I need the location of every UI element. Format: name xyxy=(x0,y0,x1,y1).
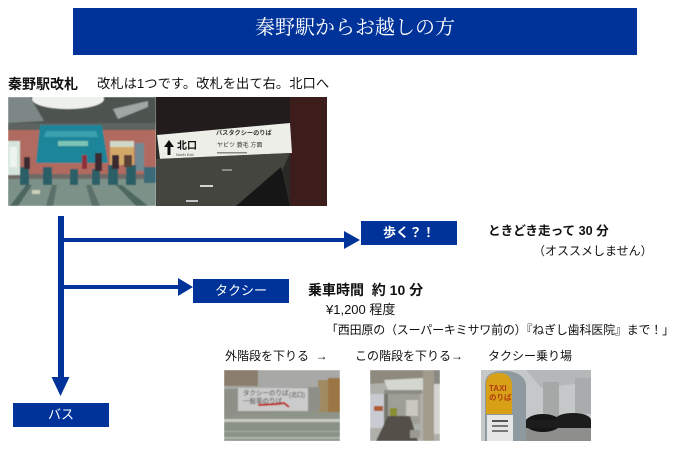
photo: north exit sign xyxy=(156,97,327,206)
title banner xyxy=(73,8,637,55)
caption: outer stairs: 外階段を下りる → xyxy=(225,349,328,363)
label: taxi xyxy=(193,279,289,303)
arrow: down to bus xyxy=(52,216,70,396)
text: taxi destination: 「西田原の（スーパーキミサワ前の）『ねぎし歯科医院』まで！」 xyxy=(326,323,674,337)
arrow: to walking xyxy=(64,231,360,249)
photo: taxi stand xyxy=(481,370,591,441)
photo: stair sign xyxy=(224,370,340,441)
text: gate directions: 改札は1つです。改札を出て右。北口へ xyxy=(97,76,329,91)
photo: ticket gates xyxy=(8,97,156,206)
photo: north exit sign: 北口 xyxy=(177,140,197,152)
label: taxi: タクシー xyxy=(215,283,267,298)
photo: taxi stand: TAXI xyxy=(489,384,507,393)
text: taxi ride time: 乗車時間 約 10 分 xyxy=(308,282,423,298)
text: walking time: ときどき走って 30 分 xyxy=(488,224,609,238)
photo: north exit sign: North Exit xyxy=(176,152,194,157)
photo: north exit sign: バスタクシーのりば xyxy=(216,129,272,137)
caption: taxi stand: タクシー乗り場 xyxy=(488,349,572,363)
arrow: to taxi xyxy=(64,278,193,296)
caption: these stairs: この階段を下りる→ xyxy=(355,349,463,363)
photo: taxi stand: のりば xyxy=(489,392,512,402)
photo: stairway entrance xyxy=(370,370,440,441)
text: taxi fare: ¥1,200 程度 xyxy=(326,302,395,317)
photo: stair sign: タクシーのりば xyxy=(243,388,289,397)
photo: stair sign: 一般車のりば xyxy=(243,396,282,405)
photo: stair sign: (北口) xyxy=(289,391,305,399)
photo: north exit sign: ヤビツ 蓑毛 方面 xyxy=(217,141,262,149)
label: bus: バス xyxy=(48,407,74,422)
heading: station gate: 秦野駅改札 xyxy=(8,76,78,92)
title banner: 秦野駅からお越しの方 xyxy=(255,17,455,39)
label: walking: 歩く？！ xyxy=(383,225,435,240)
label: walking xyxy=(361,221,457,245)
label: bus xyxy=(13,403,109,427)
text: not recommended: （オススメしません） xyxy=(533,244,653,258)
